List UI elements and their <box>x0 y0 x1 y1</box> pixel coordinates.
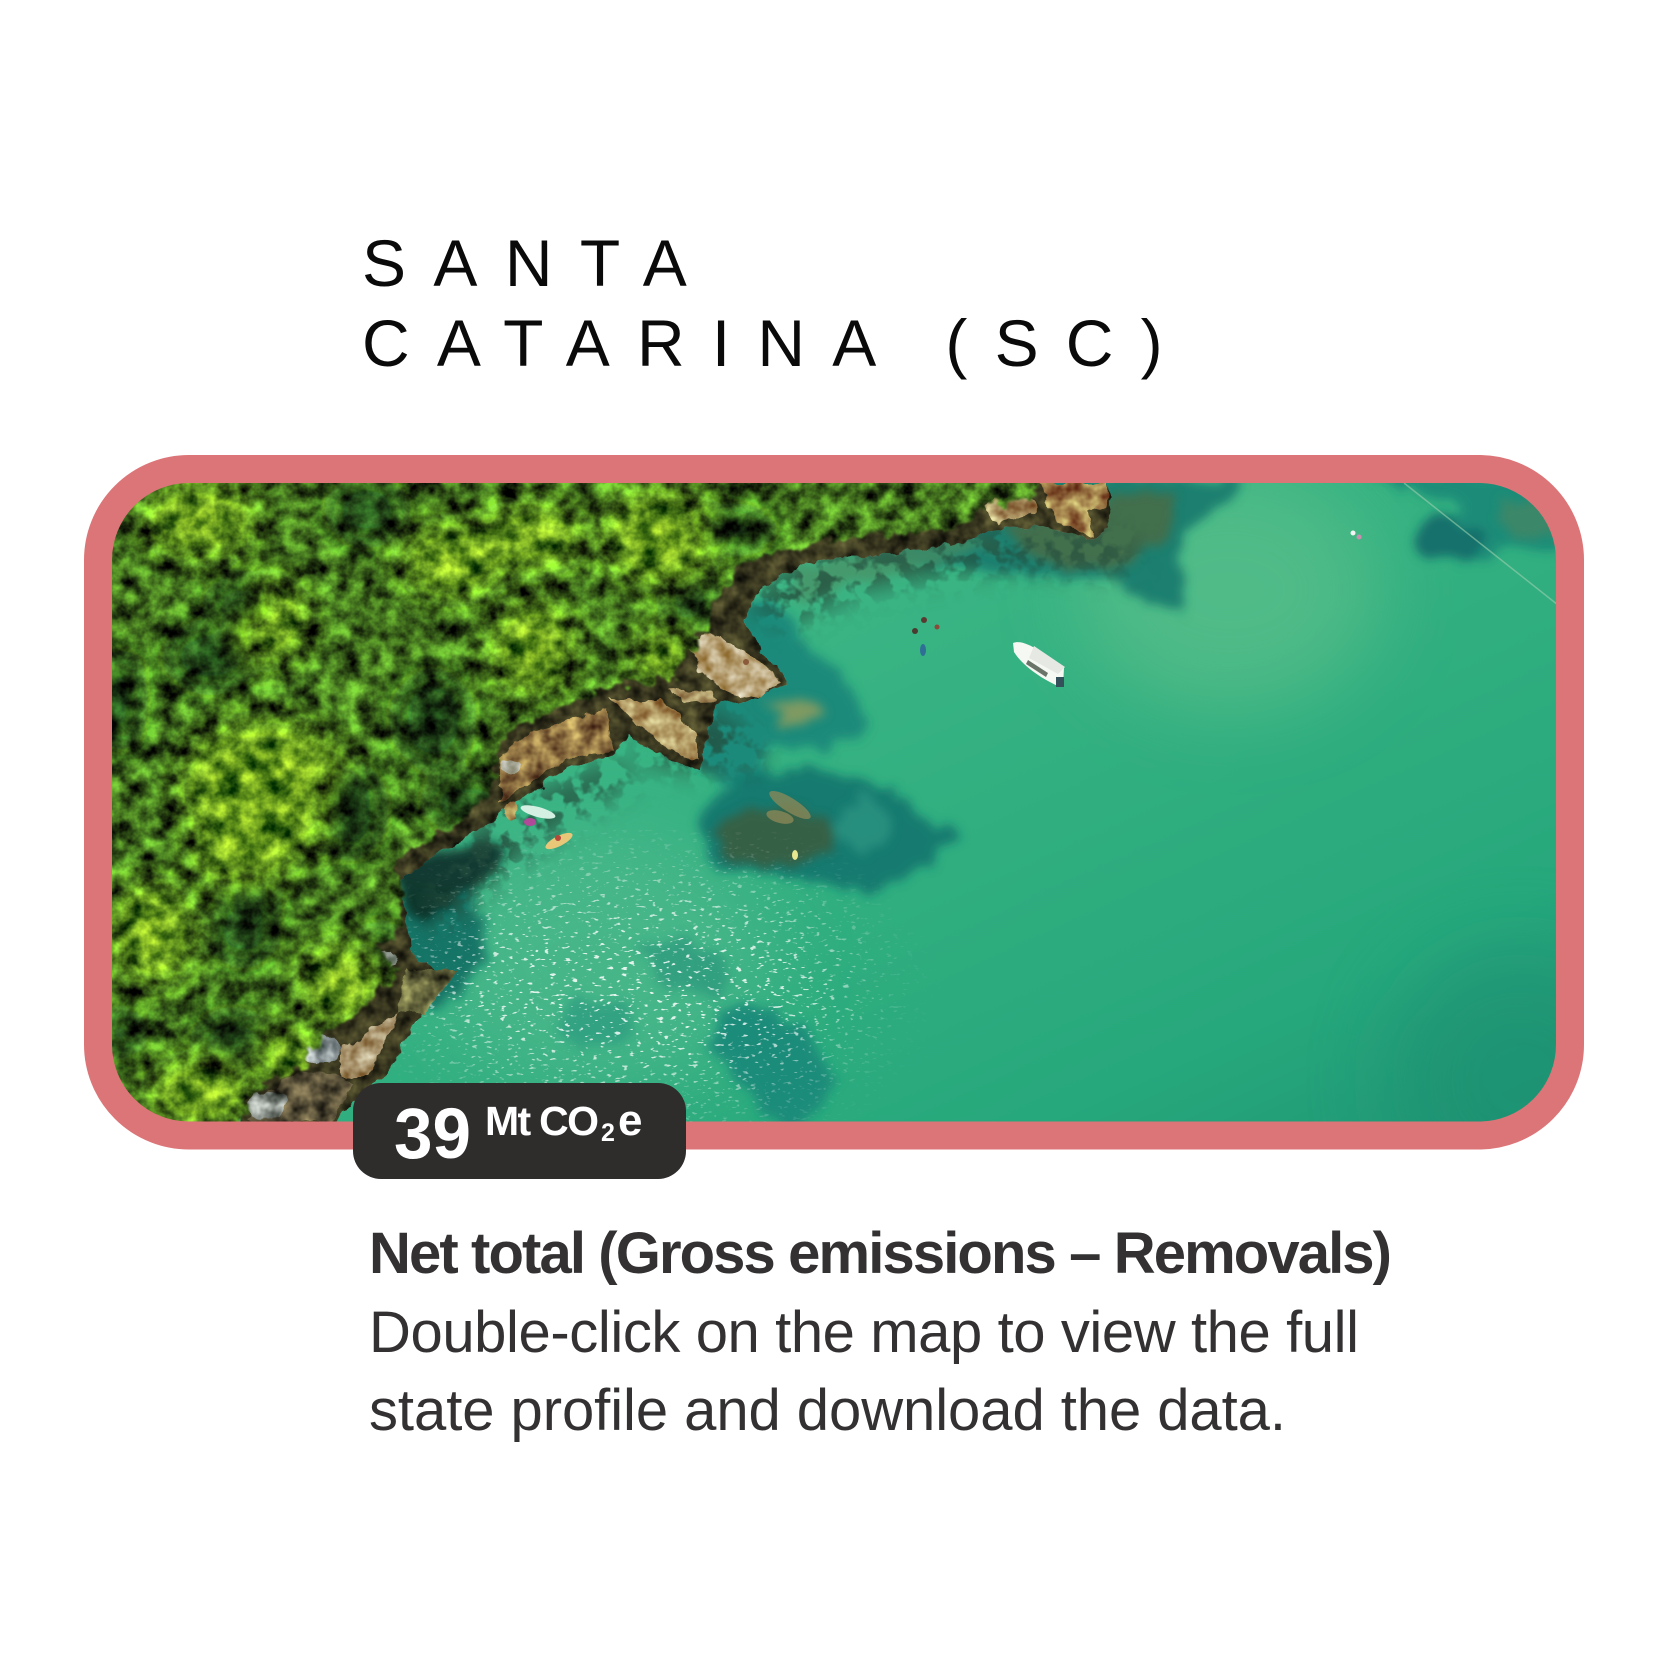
photo: aerial view of forested coast and turquoise bay <box>112 483 1556 1122</box>
description body <box>369 1300 1359 1443</box>
underwater rocks and seabed <box>395 490 1560 1010</box>
subscript two: 2 <box>601 1119 615 1147</box>
description body: Double-click on the map to view the full <box>369 1300 1359 1365</box>
shallow reef shadows <box>550 470 1565 1130</box>
forest canopy <box>112 483 1040 1122</box>
big number: 39 <box>394 1095 471 1174</box>
reef rock highlights <box>766 791 811 824</box>
unit suffix: e <box>618 1096 642 1145</box>
paddleboards and swimmers <box>519 530 1362 860</box>
shoreline rocks <box>240 483 1108 1125</box>
rope line <box>1404 483 1558 605</box>
mottled seabed near the shore <box>428 525 1136 929</box>
sun sparkles on the water <box>393 830 918 1122</box>
pink rounded frame <box>98 469 1570 1136</box>
title: CATARINA (SC) <box>362 306 1190 380</box>
water <box>238 483 1556 1122</box>
unit: Mt CO <box>485 1098 599 1144</box>
badge: net emissions value <box>353 1083 686 1179</box>
description heading: Net total (Gross emissions – Removals) <box>369 1221 1392 1286</box>
canopy light and shade <box>100 480 773 1125</box>
description body: state profile and download the data. <box>369 1378 1286 1443</box>
title: SANTA <box>362 226 714 300</box>
icon: white boat <box>1013 642 1065 687</box>
title <box>362 226 1190 380</box>
foliage texture <box>112 483 1038 1122</box>
